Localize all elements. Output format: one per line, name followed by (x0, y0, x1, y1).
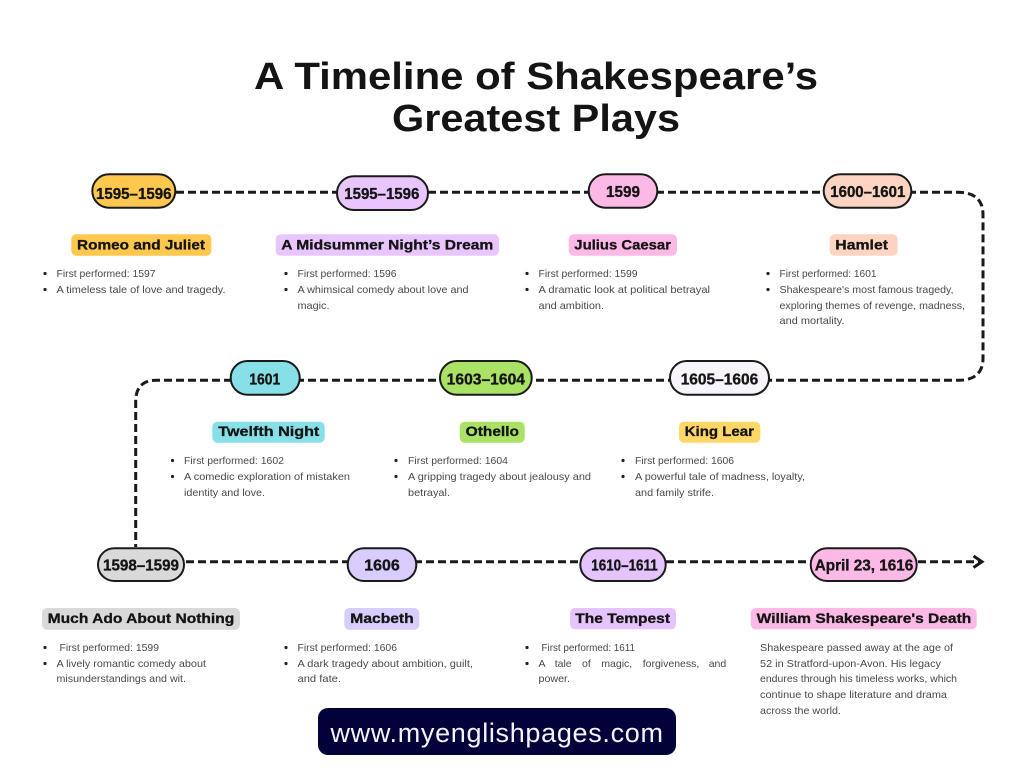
details: A dramatic look at political betrayal (538, 284, 710, 296)
description: endures through his timeless works, which (760, 673, 957, 685)
details (171, 455, 350, 499)
details: A timeless tale of love and tragedy. (56, 284, 226, 296)
details: First performed: 1604 (408, 455, 508, 467)
year pill (440, 361, 532, 395)
year pill (348, 548, 416, 581)
title: Greatest Plays (392, 98, 680, 140)
play name: Much Ado About Nothing (48, 610, 234, 626)
year pill: 1598–1599 (103, 558, 179, 574)
details: exploring themes of revenge, madness, (780, 300, 965, 312)
year pill (231, 361, 300, 395)
details: First performed: 1611 (542, 642, 635, 654)
year pill: 1603–1604 (447, 372, 525, 388)
website banner: www.myenglishpages.com (330, 718, 663, 748)
details: First performed: 1601 (780, 268, 877, 280)
details (621, 455, 805, 499)
details (43, 642, 206, 685)
panel: The Tempest (525, 548, 726, 685)
details: misunderstandings and wit. (56, 673, 186, 685)
year pill (580, 548, 666, 581)
play name (71, 234, 211, 256)
panel: Romeo and Juliet (43, 174, 226, 296)
title (254, 56, 818, 140)
play name (460, 422, 525, 443)
year pill (589, 174, 657, 208)
description: across the world. (760, 705, 841, 717)
details: A whimsical comedy about love and (298, 284, 469, 296)
date pill: April 23, 1616 (815, 558, 914, 574)
event name (751, 608, 977, 629)
details (525, 642, 726, 685)
play name (830, 234, 898, 256)
panel: Julius Caesar (525, 174, 710, 312)
play name (276, 234, 499, 256)
details: and ambition. (538, 300, 604, 312)
panel: Twelfth Night (171, 361, 350, 499)
details (394, 455, 591, 499)
year pill: 1605–1606 (681, 372, 759, 388)
website banner (318, 708, 676, 755)
panel: A Midsummer Night's Dream (276, 176, 499, 312)
details: A lively romantic comedy about (56, 658, 206, 670)
details: First performed: 1606 (298, 642, 397, 654)
description (760, 642, 957, 717)
play name: Hamlet (835, 236, 888, 252)
details (766, 268, 965, 327)
details: First performed: 1596 (298, 268, 397, 280)
details: and fate. (298, 673, 341, 685)
play name (212, 422, 325, 443)
panel: Hamlet (766, 174, 965, 327)
play name: King Lear (685, 423, 755, 439)
play name (679, 422, 760, 443)
details: identity and love. (184, 487, 265, 499)
panel: William Shakespeare's Death (751, 548, 977, 717)
play name: Julius Caesar (574, 236, 672, 252)
details (43, 268, 226, 296)
year pill: 1606 (364, 558, 400, 574)
panel: Othello (394, 361, 591, 499)
play name (42, 608, 240, 630)
dashed final timeline with arrow (186, 556, 982, 568)
year pill: 1610–1611 (591, 558, 658, 574)
details: and family strife. (635, 487, 714, 499)
play name: Romeo and Juliet (77, 236, 205, 252)
panel: King Lear (621, 361, 805, 499)
date pill (811, 548, 917, 581)
details: Shakespeare's most famous tragedy, (780, 284, 954, 296)
event name: William Shakespeare's Death (757, 610, 971, 626)
year pill (92, 174, 175, 208)
details (284, 642, 473, 685)
play name: A Midsummer Night’s Dream (281, 236, 493, 252)
play name (344, 608, 419, 630)
panel: Macbeth (284, 548, 473, 685)
year pill (98, 548, 184, 581)
year pill (824, 174, 911, 208)
details: magic, (601, 658, 632, 670)
year pill: 1600–1601 (830, 184, 906, 201)
year pill: 1601 (249, 372, 281, 388)
details: A powerful tale of madness, loyalty, (635, 471, 805, 483)
description: 52 in Stratford-upon-Avon. His legacy (760, 658, 942, 670)
description: Shakespeare passed away at the age of (760, 642, 953, 654)
year pill: 1595–1596 (344, 186, 420, 203)
description: continue to shape literature and drama (760, 689, 947, 701)
play name: The Tempest (575, 610, 670, 626)
details: First performed: 1606 (635, 455, 734, 467)
play name (569, 234, 677, 256)
details: A dark tragedy about ambition, guilt, (298, 658, 473, 670)
details: of (582, 658, 591, 670)
year pill: 1599 (606, 184, 640, 201)
details: A comedic exploration of mistaken (184, 471, 350, 483)
details: and (709, 658, 726, 670)
details: A (538, 658, 546, 670)
play name (570, 608, 676, 629)
year pill: 1595–1596 (96, 186, 172, 203)
details: tale (555, 658, 572, 670)
year pill (337, 176, 428, 210)
details: First performed: 1599 (538, 268, 638, 280)
details: forgiveness, (643, 658, 699, 670)
details: First performed: 1599 (60, 642, 159, 654)
title: A Timeline of Shakespeare’s (254, 56, 818, 98)
panel: Much Ado About Nothing (42, 548, 240, 685)
year pill (670, 361, 769, 395)
details: magic. (298, 300, 330, 312)
details: and mortality. (780, 315, 844, 327)
details (284, 268, 469, 312)
details: A gripping tragedy about jealousy and (408, 471, 591, 483)
play name: Twelfth Night (218, 423, 320, 439)
details (525, 268, 710, 312)
details: First performed: 1597 (56, 268, 156, 280)
details: betrayal. (408, 487, 450, 499)
details: power. (538, 673, 570, 685)
play name: Othello (466, 423, 519, 439)
details: First performed: 1602 (184, 455, 284, 467)
play name: Macbeth (350, 610, 414, 626)
dashed timeline connector (136, 192, 983, 547)
